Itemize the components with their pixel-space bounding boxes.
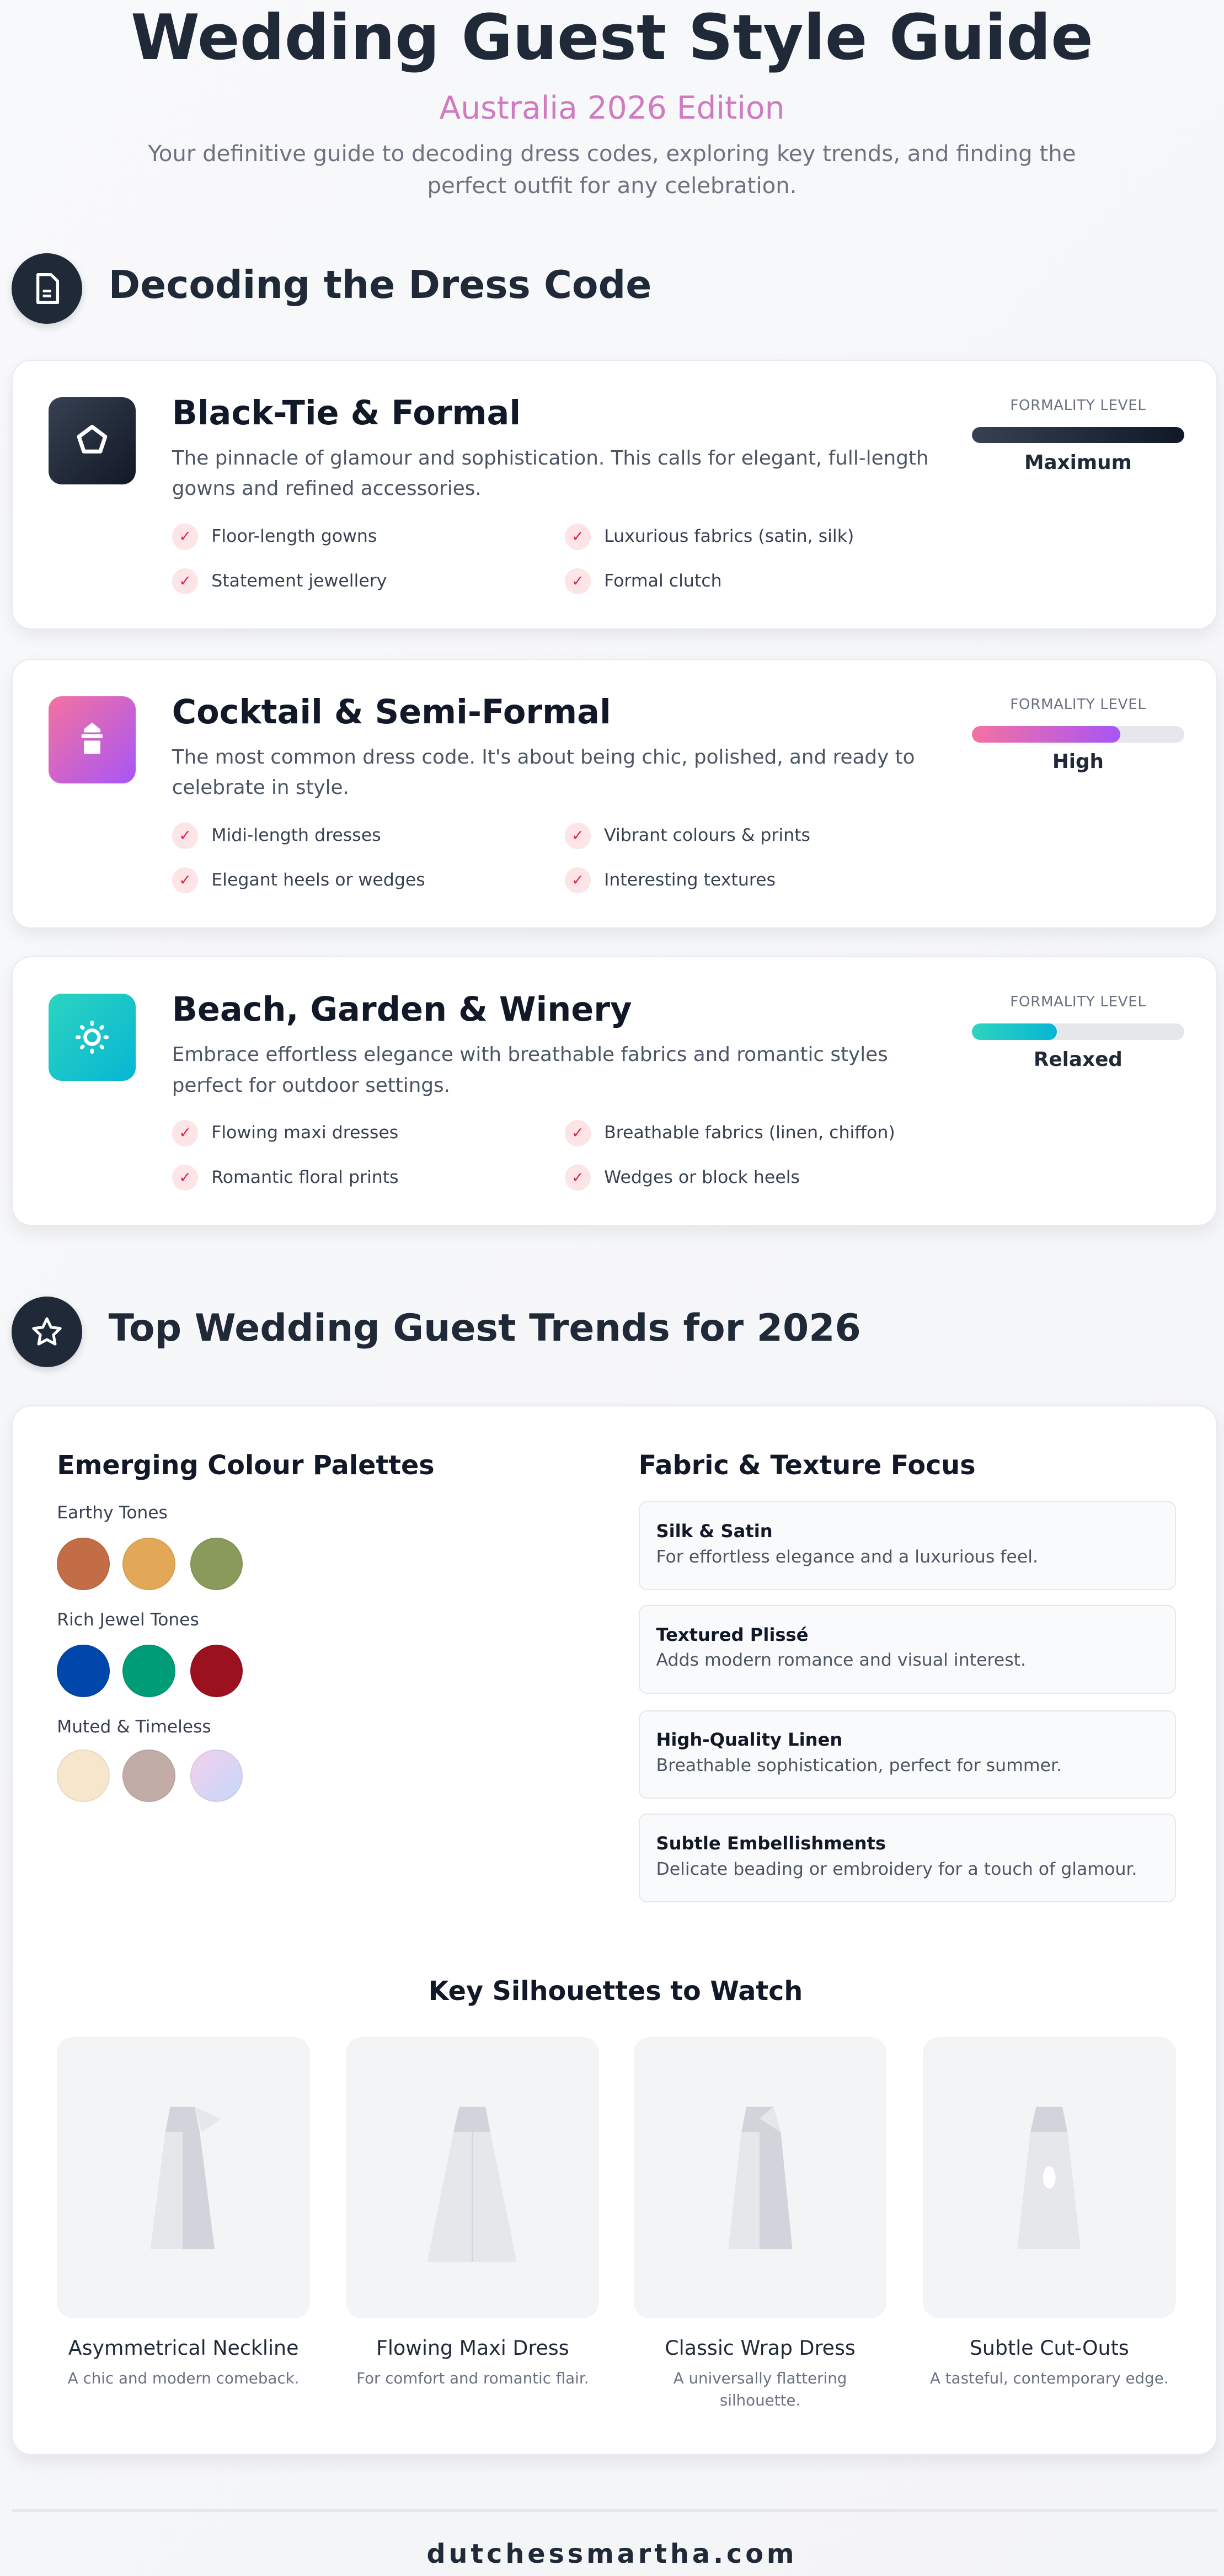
formality meter: FORMALITY LEVEL (1010, 994, 1146, 1010)
section heading: trends: Top Wedding Guest Trends for 2026 (109, 1306, 861, 1350)
formality meter: FORMALITY LEVEL (1010, 397, 1146, 414)
checklist: Wedges or block heels (604, 1167, 800, 1187)
formality meter: FORMALITY LEVEL (1010, 696, 1146, 713)
labels: silhouettes: A tasteful, contemporary edge. (930, 2369, 1169, 2387)
palette: muted: Muted & Timeless (57, 1717, 211, 1737)
card description: The most common dress code. It's about being chic, polished, and ready to celebrate in style. (172, 746, 915, 799)
fabric: embellishments: Delicate beading or embroidery for a touch of glamour. (656, 1859, 1137, 1879)
checklist: ✓ (571, 1169, 584, 1186)
labels: silhouettes: Classic Wrap Dress (665, 2336, 856, 2360)
panel: black-tie (12, 360, 1217, 630)
labels: silhouettes: Flowing Maxi Dress (376, 2336, 569, 2360)
checklist: ✓ (179, 528, 191, 545)
card description: Embrace effortless elegance with breathable fabrics and romantic styles perfect for outdoor settings. (172, 1043, 888, 1097)
checklist: ✓ (179, 1169, 191, 1186)
labels: silhouettes (68, 2336, 1169, 2409)
checklist (172, 524, 854, 594)
checklist: ✓ (179, 827, 191, 844)
checklist: Romantic floral prints (211, 1167, 399, 1187)
checklist (172, 823, 810, 893)
formality meter (972, 696, 1184, 773)
palette: earthy: Earthy Tones (57, 1503, 168, 1523)
formality meter: High (1052, 750, 1104, 773)
fabric: embellishments: Subtle Embellishments (656, 1833, 886, 1854)
section icon: star (12, 1297, 82, 1367)
heading: silhouettes: Key Silhouettes to Watch (429, 1976, 803, 2007)
checklist: Midi-length dresses (211, 825, 381, 845)
fabric: silk: Silk & Satin (656, 1521, 773, 1542)
icon: cake (49, 696, 136, 783)
checklist: ✓ (571, 872, 584, 889)
checklist: Floor-length gowns (211, 526, 377, 546)
formality meter (972, 994, 1184, 1070)
silhouette: maxi (346, 2037, 599, 2318)
checklist: Luxurious fabrics (satin, silk) (604, 526, 854, 546)
labels: silhouettes: A universally flattering silhouette. (674, 2369, 847, 2409)
section icon: document (12, 253, 82, 324)
fabric: plisse: Adds modern romance and visual interest. (656, 1650, 1026, 1670)
title: Wedding Guest Style Guide (131, 1, 1093, 74)
checklist: Elegant heels or wedges (211, 870, 425, 890)
checklist: Interesting textures (604, 870, 776, 890)
fabric: plisse: Textured Plissé (656, 1624, 809, 1645)
palette: jewel: Rich Jewel Tones (57, 1610, 199, 1630)
section heading: dress code: Decoding the Dress Code (109, 263, 651, 307)
checklist: ✓ (179, 573, 191, 590)
checklist: Vibrant colours & prints (604, 825, 810, 845)
silhouette: cut-outs (923, 2037, 1176, 2318)
checklist: ✓ (571, 827, 584, 844)
checklist: Statement jewellery (211, 571, 387, 591)
fabric: linen: Breathable sophistication, perfect for summer. (656, 1756, 1062, 1775)
labels: silhouettes: Asymmetrical Neckline (68, 2336, 298, 2360)
silhouette: asymmetrical (57, 2037, 310, 2318)
formality meter: Relaxed (1034, 1048, 1123, 1070)
fabric: silk (639, 1501, 1176, 1590)
checklist (172, 1120, 895, 1191)
heading: fabric: Fabric & Texture Focus (639, 1450, 976, 1481)
subtitle: Australia 2026 Edition (439, 90, 784, 126)
panel: beach (12, 956, 1217, 1226)
card title: Beach, Garden & Winery (172, 990, 632, 1029)
checklist: ✓ (179, 872, 191, 889)
heading: colour palettes: Emerging Colour Palettes (57, 1450, 435, 1481)
palette: muted (57, 1717, 243, 1802)
panel: trends (12, 1405, 1217, 2455)
checklist: Formal clutch (604, 571, 722, 591)
silhouette: wrap (634, 2037, 886, 2318)
checklist: ✓ (571, 573, 584, 590)
formality meter (972, 397, 1184, 474)
formality meter: Maximum (1024, 451, 1132, 474)
card title: Black-Tie & Formal (172, 394, 521, 433)
fabric: embellishments (639, 1814, 1176, 1902)
card description: The pinnacle of glamour and sophistication. This calls for elegant, full-length gowns and refined accessories. (172, 447, 929, 500)
labels: silhouettes: For comfort and romantic flair. (356, 2369, 589, 2387)
palette: jewel (57, 1610, 243, 1697)
icon: sun (49, 994, 136, 1081)
fabric: silk: For effortless elegance and a luxurious feel. (656, 1547, 1038, 1567)
checklist: ✓ (571, 1124, 584, 1142)
palette: earthy (57, 1503, 243, 1590)
icon: gem (49, 397, 136, 484)
intro text: Your definitive guide to decoding dress codes, exploring key trends, and finding the perfect outfit for any celebration. (148, 141, 1076, 199)
card title: Cocktail & Semi-Formal (172, 693, 611, 732)
fabric: linen (639, 1710, 1176, 1799)
fabric: plisse (639, 1605, 1176, 1694)
panel: cocktail (12, 659, 1217, 929)
labels: silhouettes: Subtle Cut-Outs (970, 2336, 1129, 2360)
checklist: Flowing maxi dresses (211, 1123, 398, 1143)
checklist: Breathable fabrics (linen, chiffon) (604, 1123, 895, 1143)
labels: silhouettes: A chic and modern comeback. (68, 2369, 299, 2387)
checklist: ✓ (571, 528, 584, 545)
checklist: ✓ (179, 1124, 191, 1142)
footer: dutchessmartha.com (426, 2539, 798, 2569)
fabric: linen: High-Quality Linen (656, 1729, 842, 1750)
